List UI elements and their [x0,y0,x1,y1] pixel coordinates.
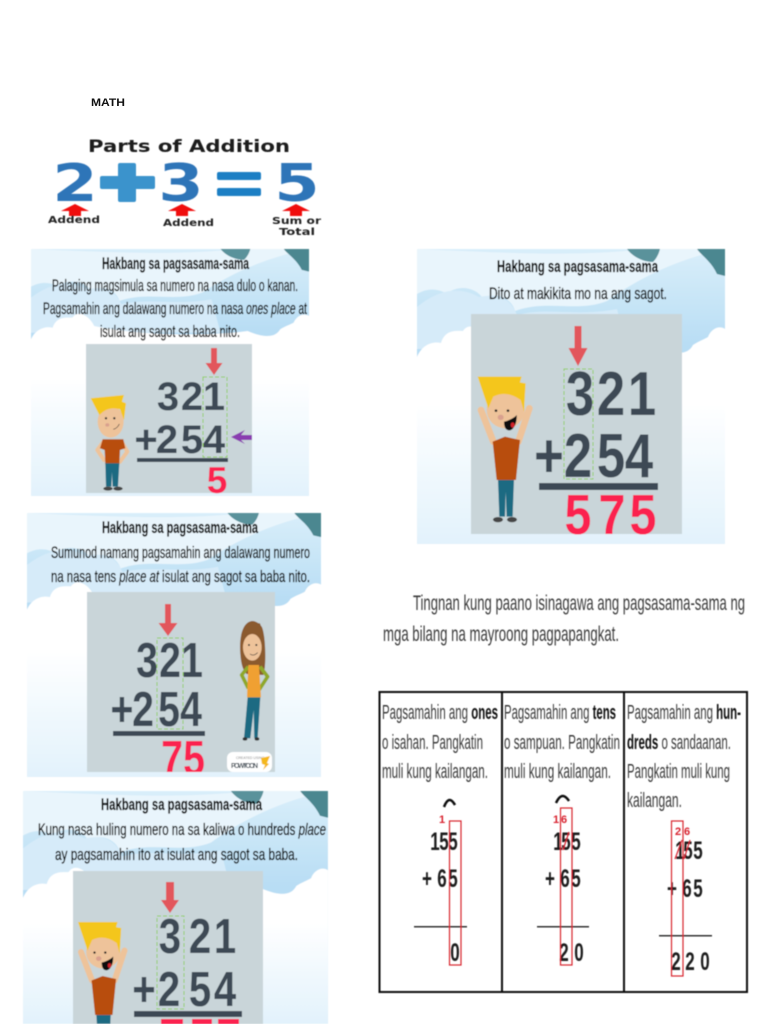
badge: Powtoon: CREATED USING [236,756,265,760]
sum bar [137,458,228,462]
panel: step one, ones place [31,249,309,501]
addition: 321: 321 [159,909,236,964]
number: 2: 2 [52,152,98,213]
addition: 321: 321 [157,375,225,419]
red highlight box [450,821,461,965]
arrow: addend two [168,204,196,216]
sum: 155 + 65 = 0: 155 [430,828,458,856]
answer: cropped tops of 575 [161,1019,239,1024]
carry digits: 26 [675,826,690,838]
red down arrow [568,326,588,366]
heading: Hakbang sa pagsasama-sama [102,519,259,537]
panel: parts of addition [48,137,321,238]
column 1: ones: Pagsamahin ang ones [382,702,498,724]
instruction text: Kung nasa huling numero na sa kaliwa o hundreds place [38,821,326,839]
panel: step two, tens place [27,513,321,786]
worksheet card [87,592,275,772]
instruction text: isulat ang sagot sa baba nito. [100,323,240,341]
panel background [417,249,725,544]
instruction text: Dito at makikita mo na ang sagot. [489,285,667,303]
label: sum or total: Sum or [272,216,321,227]
sum: 155 + 65 = 20 [537,828,589,967]
addition: +254: +254 [534,422,654,491]
worksheet card [73,871,263,1024]
sum: 155 + 65 = 220: 220 [671,948,710,976]
character: woman [240,621,268,741]
character: boy thinking [91,395,127,491]
instruction text: Pagsamahin ang dalawang numero na nasa ones place at [43,300,307,318]
addition: 321: 321 [136,634,203,688]
column 2: tens: Pagsamahin ang tens [504,702,616,724]
addition: +254: +254 [111,683,202,737]
text block: regrouping intro: mga bilang na mayroong pagpapangkat. [383,622,619,646]
red down arrow [206,348,222,375]
red highlight box and strike [560,808,572,965]
heading: Hakbang sa pagsasama-sama [497,258,659,276]
answer: 75: 75 [161,732,205,786]
heading: Hakbang sa pagsasama-sama [102,255,250,273]
icon: equals sign [217,172,261,196]
column 1: ones: o isahan. Pangkatin [382,732,483,754]
addition: 321: 321 [566,360,656,429]
instruction text [51,544,310,586]
red down arrow [158,604,178,636]
carry digit: 1 [439,814,445,826]
carry digits: 16 [553,814,567,826]
sum: 155 + 65 = 0: 0 [450,939,460,967]
column 1: ones [382,702,498,967]
column 2: tens: muli kung kailangan. [504,761,611,783]
red highlight box and strikes [672,821,690,976]
dashed highlight: hundreds column [564,369,593,479]
addition: +254: +254 [132,962,236,1017]
label: addend two: Addend [163,218,214,229]
sum: 155 + 65 = 20: 155 [553,828,581,856]
heading: parts of addition: Parts of Addition [88,137,290,156]
column 2: tens: o sampuan. Pangkatin [504,732,620,754]
number: 5: 5 [274,152,320,213]
character: boy cheering [478,377,529,522]
instruction text: na nasa tens place at isulat ang sagot sa baba nito. [51,568,310,586]
number: 3: 3 [158,152,204,213]
label: addend one: Addend [48,215,100,226]
answer: 5: 5 [207,460,227,501]
addition: +254: +254 [134,418,226,462]
table grid [380,692,747,992]
sum bar [134,1011,242,1017]
answer: 575: 575 [565,483,656,547]
character: boy cheering [78,922,124,1024]
instruction text: Sumunod namang pagsamahin ang dalawang numero [51,544,310,562]
sum: 155 + 65 = 220: 155 [675,837,703,865]
panel: final answer [417,249,725,547]
sum bar [113,731,205,736]
table: regrouping steps [380,692,747,992]
sum: 155 + 65 = 20: 20 [559,939,584,967]
sum bar [539,483,658,490]
icon: plus sign [100,163,155,202]
dashed highlight: hundreds column [157,916,184,1009]
red down arrow [161,882,179,913]
arrow: sum [282,204,310,216]
sum: 155 + 65 = 220 [659,837,712,976]
instruction text: ay pagsamahin ito at isulat ang sagot sa baba. [55,846,298,864]
column 3: hundreds [627,702,741,976]
sum: 155 + 65 = 0: +65 [422,865,458,893]
label: sum or total [272,216,321,238]
dashed highlight: ones column [203,377,227,457]
panel background [27,513,321,777]
worksheet card [86,344,252,493]
text block: regrouping intro [383,591,745,646]
carry arc [556,796,569,803]
heading: MATH: MATH [91,97,125,109]
sum: 155 + 65 = 20: +65 [545,865,581,893]
column 2: tens [504,702,620,967]
heading: Hakbang sa pagsasama-sama [101,796,263,814]
sum: 155 + 65 = 220: +65 [667,875,703,903]
worksheet card [471,314,682,534]
badge: Powtoon: POWTOON [231,763,258,770]
dashed highlight: tens column [157,638,183,729]
instruction text [38,821,326,864]
instruction text: Palaging magsimula sa numero na nasa dulo o kanan. [52,277,298,295]
column 3: hundreds: kailangan. [627,790,682,812]
panel background [31,249,309,496]
arrow: addend one [61,204,89,216]
instruction text [43,277,307,341]
carry arc [444,800,455,807]
sum: 155 + 65 = 0 [414,828,467,967]
panel background [23,791,328,1024]
badge: Powtoon [227,752,272,772]
panel: step three, hundreds place [23,791,328,1024]
column 1: ones: muli kung kailangan. [382,761,488,783]
label: sum or total: Total [279,227,315,238]
purple arrow [231,430,252,444]
